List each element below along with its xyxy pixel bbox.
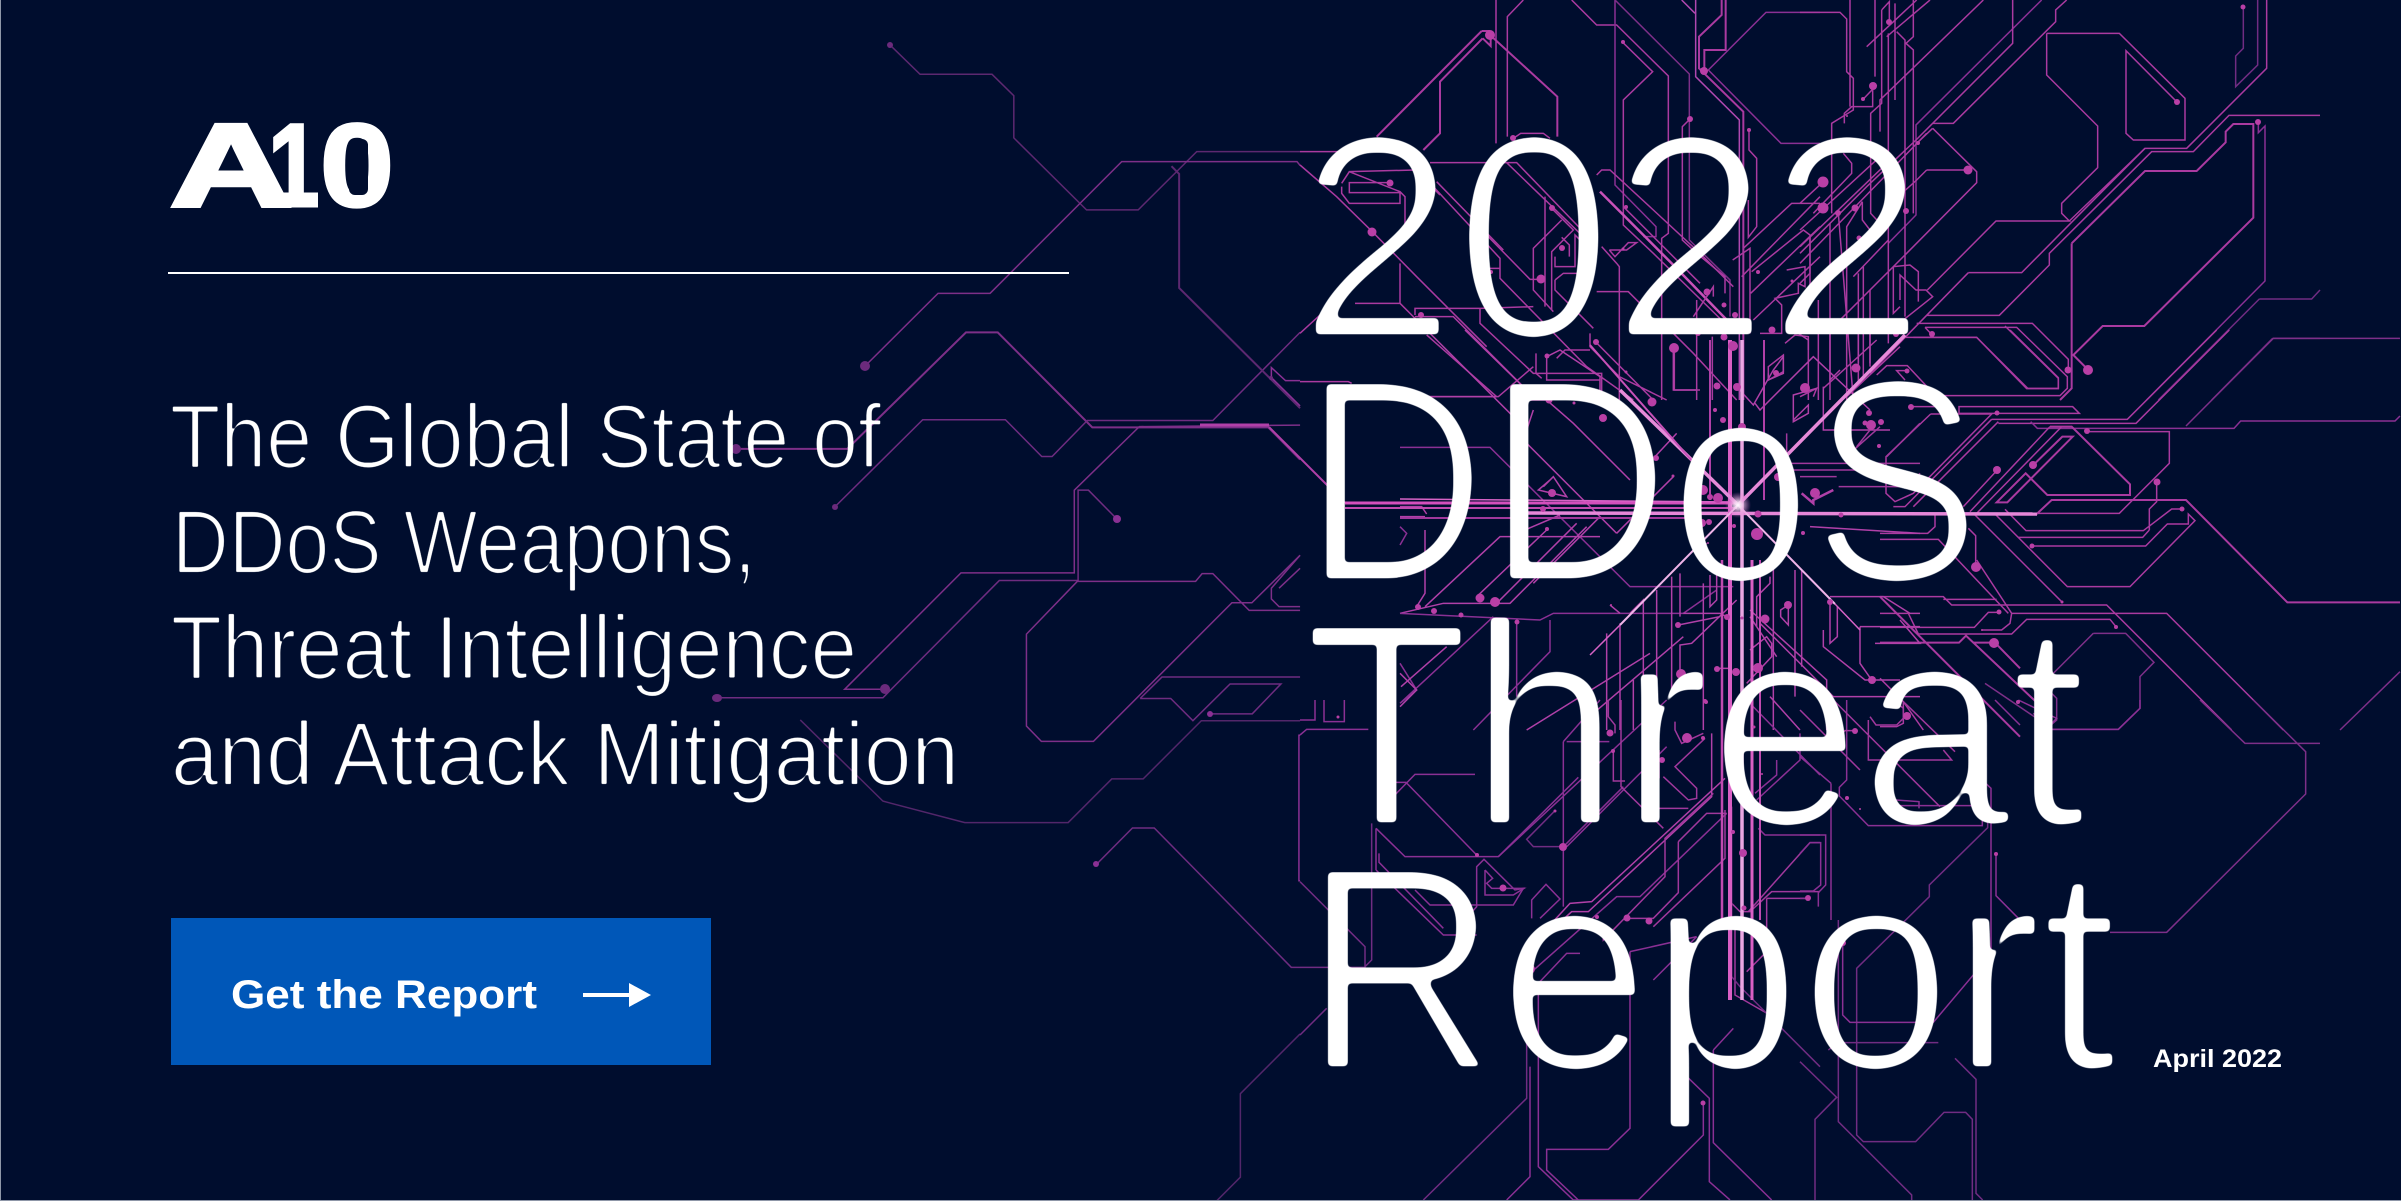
circuit: bottom traces [1300, 700, 1820, 1200]
main title: 2022 [1299, 75, 1925, 399]
subtitle: Threat Intelligence [171, 598, 857, 698]
circuit: bright central bundle [1200, 335, 2037, 1000]
button: Get the Report [171, 918, 711, 1065]
subtitle: DDoS Weapons, [172, 493, 756, 593]
circuit: centre glow [1725, 492, 1751, 518]
main title: DDoS [1303, 319, 1981, 643]
main title: Threat [1304, 563, 2087, 887]
A10 logo [170, 100, 394, 232]
circuit: node dots [1336, 4, 2261, 1106]
main title [1299, 75, 2118, 1132]
divider rule [168, 272, 1069, 274]
circuit: top centre traces [1300, 0, 1820, 400]
A10 logo: A [170, 100, 292, 232]
date label: April 2022 [2153, 1045, 2282, 1073]
A10 logo: 1 [268, 100, 320, 232]
circuit: centre left traces [1400, 330, 1920, 730]
circuit: top right traces [1800, 0, 2320, 400]
circuit board graphic [712, 0, 2400, 1201]
circuit: bottom right traces [1800, 700, 2320, 1200]
button: Get the Report: Get the Report [231, 973, 537, 1017]
circuit: left traces [716, 45, 1300, 1201]
subtitle: The Global State of [170, 388, 882, 488]
main title: Report [1303, 807, 2118, 1132]
subtitle: and Attack Mitigation [171, 705, 959, 805]
circuit: left trace end dots [712, 42, 1273, 867]
A10 logo: 0 [320, 100, 394, 232]
circuit: middle right traces [1880, 330, 2400, 737]
icon: arrow [583, 983, 651, 1007]
subtitle [170, 388, 959, 805]
